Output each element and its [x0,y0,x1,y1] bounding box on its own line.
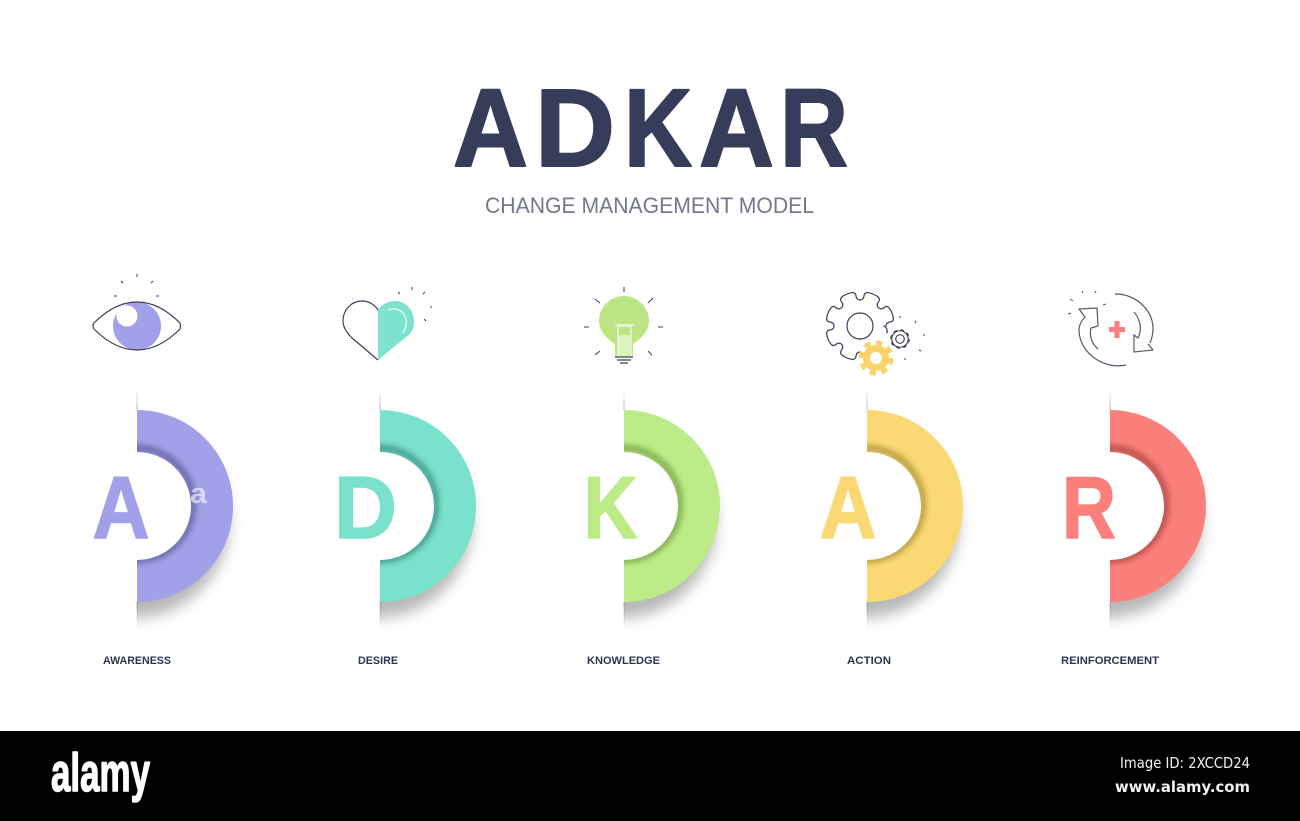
icon: cycle arrows with plus [1068,291,1153,366]
icon: light bulb [584,287,663,363]
label: knowledge: KNOWLEDGE [587,655,660,667]
footer logo: alamy [51,743,150,803]
label: awareness: AWARENESS [103,655,171,667]
title: A [453,67,528,190]
ring: A [866,390,967,626]
column: reinforcement [1062,290,1210,664]
label: desire: DESIRE [358,655,398,667]
letter K: K [584,458,638,557]
column: action [820,292,967,664]
footer bar [0,731,1300,821]
icon: gears [824,290,925,372]
icon: heart [343,287,432,360]
ring: D [380,390,480,626]
letter A: A [92,458,150,557]
ring: A [136,390,237,626]
icon: large outline gear [824,290,896,362]
title: R [780,67,848,190]
title [453,67,848,190]
subtitle: CHANGE MANAGEMENT MODEL [485,193,814,218]
letter D: D [334,458,397,557]
image id: Image ID: 2XCCD24 [1120,754,1250,772]
title: K [624,67,692,190]
column: desire [339,287,480,664]
label: action: ACTION [847,655,891,667]
icon: yellow gear [862,344,890,372]
title: D [535,67,615,190]
icon: small outline gear [891,330,909,348]
website: www.alamy.com [1115,778,1250,796]
label: reinforcement: REINFORCEMENT [1061,655,1159,667]
letter R: R [1062,458,1116,557]
title: A [699,67,774,190]
ring: R [1110,390,1210,626]
icon: eye [93,274,180,350]
ring: K [624,390,724,626]
letter A: A [820,458,876,557]
column: awareness [92,274,237,664]
column: knowledge [584,287,724,664]
watermark fragment: a [190,478,208,510]
